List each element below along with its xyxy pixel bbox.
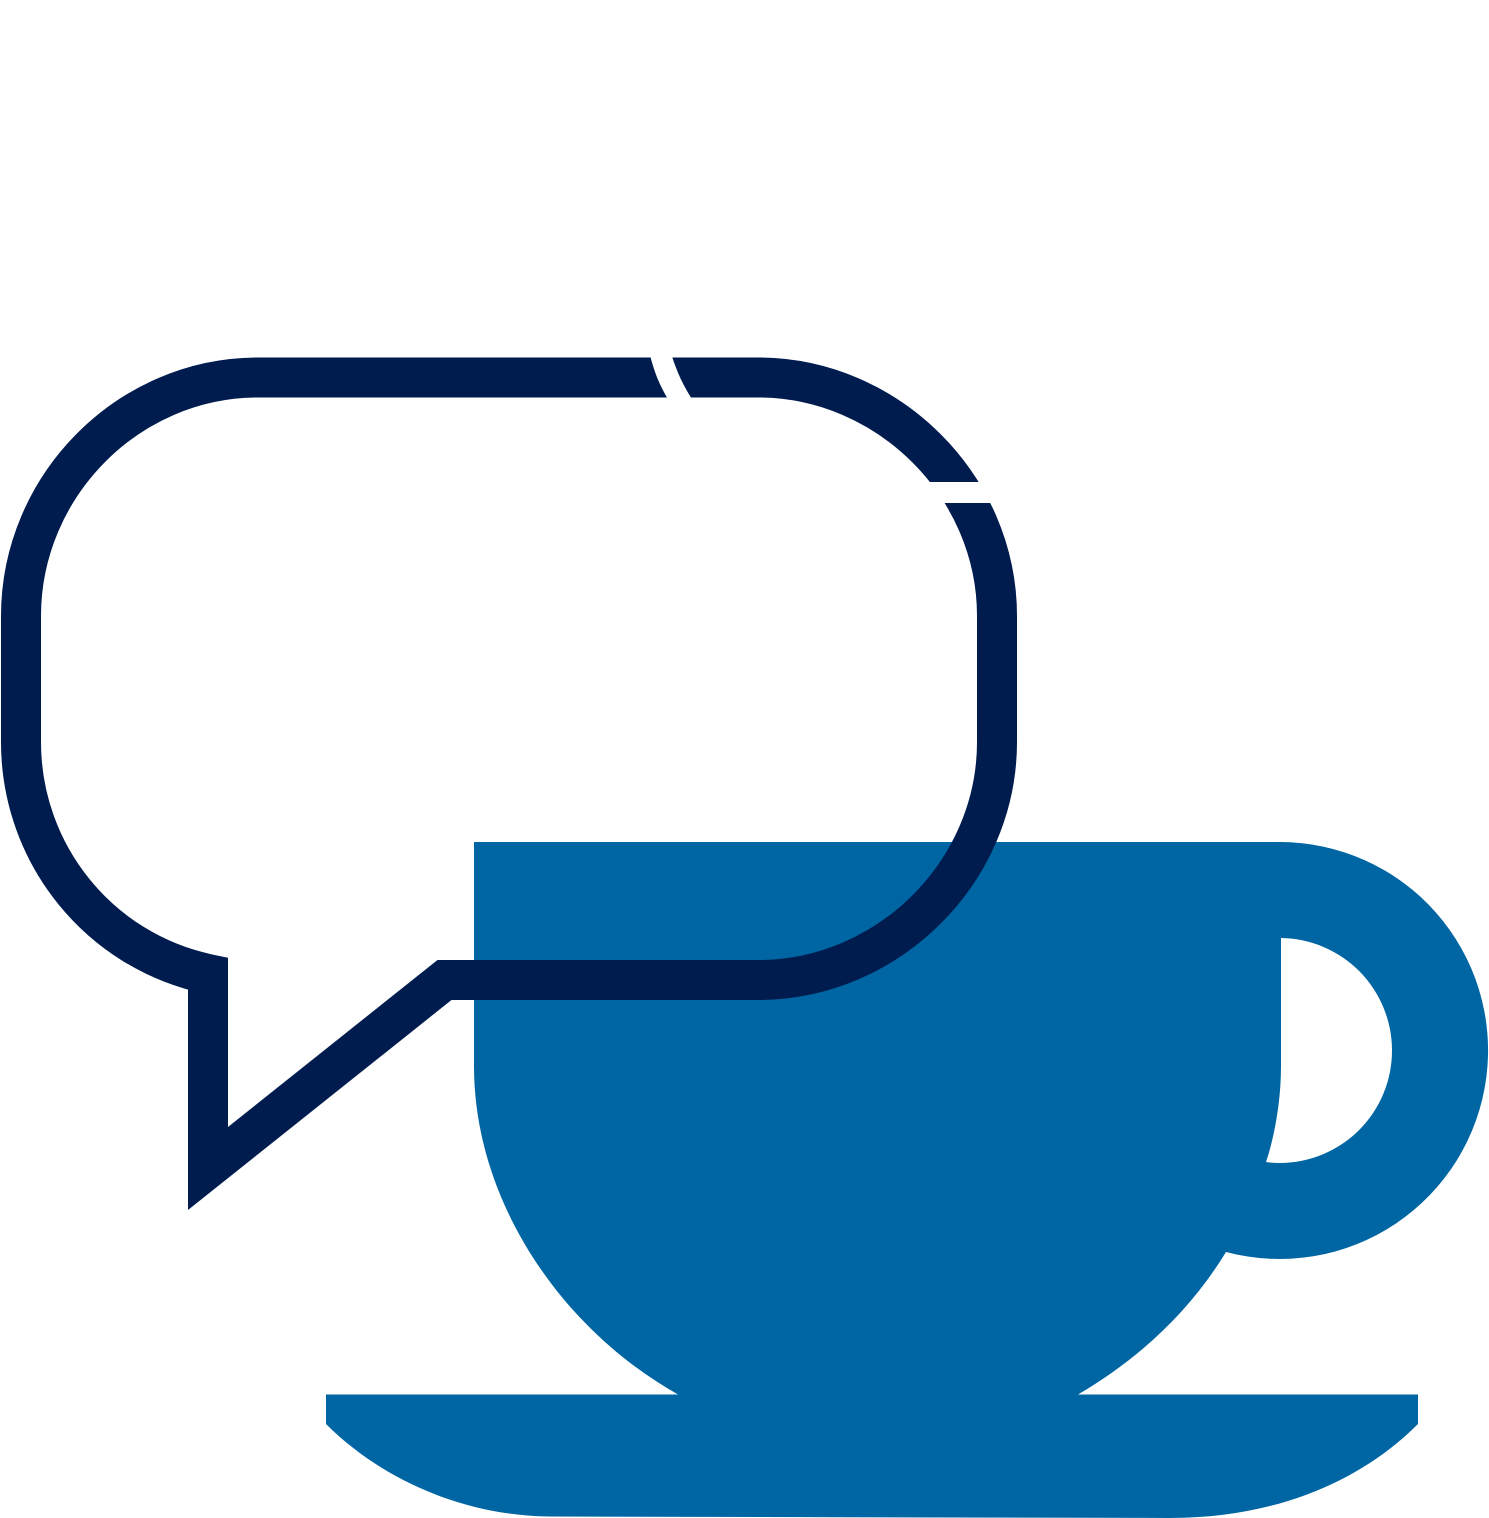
icon: coffee cup and saucer: [326, 842, 1488, 1518]
icon: speech bubble outline: [21, 355, 1000, 1168]
